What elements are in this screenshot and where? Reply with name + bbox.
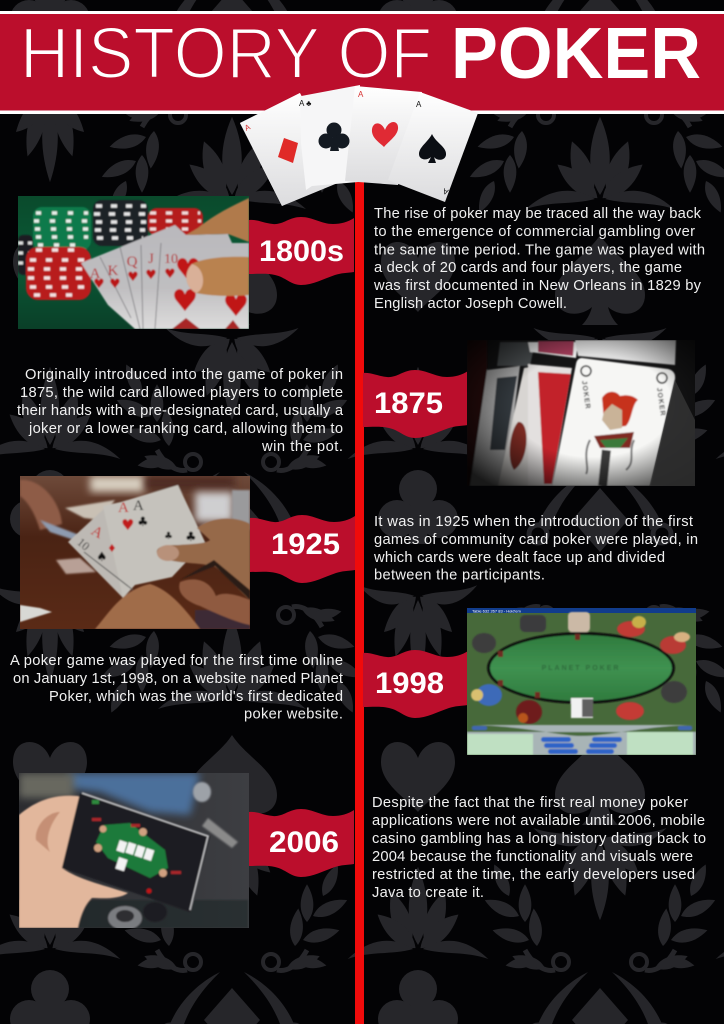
text block: 1998: poker website. [244,706,343,722]
text block: 1875: their hands with a pre-designated card, usually a [17,403,344,419]
text block: 1998: A poker game was played for the first time online [10,653,343,669]
text block: 1875: Originally introduced into the game of poker in [25,367,343,383]
cards: ♥ [121,516,134,534]
cards: ♣ [185,530,197,545]
text block: 1800s: the same time period. The game was played with [374,242,705,258]
icon: fan of four aces: A ♣ [299,99,312,108]
text block: 1998 [10,653,343,722]
year ribbon: 1998: 1998 [375,667,444,700]
photo: Planet Poker online table [467,608,696,755]
hand [186,198,249,242]
playing cards: ♥ [109,277,121,292]
photo: joker card [467,340,695,486]
seats and players [471,612,690,724]
heading: History of Poker: HISTORY OF [20,13,432,94]
year ribbon: 1925: 1925 [271,528,340,561]
year ribbon: 1925 [250,515,355,583]
red chip stack [148,208,203,236]
year ribbon: 1800s: 1800s [259,235,344,268]
text block: 1800s: The rise of poker may be traced all the way back [374,206,702,222]
icon: heart [372,122,398,147]
cards: 10 [74,535,93,553]
icon: fan of four aces: A [441,186,450,197]
playing cards: ♥ [223,289,249,324]
cards: A [88,523,106,542]
text block: 1800s: English actor Joseph Cowell. [374,296,567,312]
photo: Planet Poker online table: PLANET POKER [542,665,620,672]
text block: 1800s: was first documented in New Orleans in 1829 by [373,278,702,294]
text block: 1925: between the participants. [374,568,545,584]
playing cards: ♥ [172,284,198,319]
timeline: vertical red line [355,178,364,1024]
text block: 1998: Poker, which was the world's first dedicated [49,689,343,705]
phone [62,793,210,912]
text block: 2006: restricted at the time, the early developers used [372,867,695,883]
control panel [467,725,696,755]
cards: ♣ [164,531,173,542]
icon: fan of four aces: A [416,100,422,109]
photo: hands holding four aces [20,476,250,629]
icon: fan of four aces: A [358,90,364,99]
jester [586,392,638,486]
year ribbon: 1875 [363,370,468,438]
year ribbon: 1875: 1875 [374,387,443,420]
text block: 2006: Java to create it. [372,885,484,901]
text block: 1925: games of community card poker were played, in [374,532,698,548]
text block: 2006: casino gambling has a long history dating back to [372,831,706,847]
text block: 1800s: a deck of 20 cards and four players, the game [374,260,682,276]
text block: 1925: It was in 1925 when the introduction of the first [374,514,693,530]
playing cards: A [90,266,101,282]
playing cards: 10 [164,252,178,267]
hand [19,796,128,928]
playing cards: Q [127,254,138,270]
icon: fan of four aces: A [243,122,252,133]
cards: ♣ [137,515,149,530]
title banner [0,11,724,114]
heading: History of Poker [20,13,701,94]
year ribbon: 2006 [249,809,354,877]
playing cards: J [148,251,154,267]
black chip stack [93,200,148,246]
cards: A [118,500,129,516]
hand right [157,518,250,600]
playing cards: K [108,263,119,279]
text block: 2006: 2004 because the functionality and visuals were [372,849,693,865]
year ribbon: 2006: 2006 [269,826,339,859]
cards: ♦ [107,542,117,555]
dark chip stack [18,235,33,275]
cards: ♠ [96,550,108,565]
text block: 2006 [372,795,706,901]
playing cards [81,225,249,329]
year ribbon: 1800s [249,217,354,285]
photo: Planet Poker online table: Table 632 267 83 - Hold'em [472,608,521,614]
text block: 1875: 1875, the wild card allowed players to complete [20,385,343,401]
playing cards: ♥ [127,270,139,285]
text block: 2006: Despite the fact that the first real money poker [372,795,688,811]
text block: 2006: applications were not available until 2006, mobile [372,813,705,829]
text block: 1925 [373,514,698,584]
poker table [487,632,675,704]
cards: A [133,498,144,514]
photo: joker card: JOKER [580,380,591,410]
icon: fan of four aces [240,85,478,206]
playing cards: ♥ [175,253,201,288]
text block: 1800s [373,206,705,312]
game table [96,823,168,878]
playing cards: ♥ [93,277,105,292]
playing cards: ♥ [164,267,176,282]
text block: 1875: joker or a lower ranking card, allowing them to [28,421,343,437]
year ribbon: 1998 [363,650,468,718]
playing cards: ♥ [145,268,157,283]
community cards [116,840,154,861]
heading: History of Poker: POKER [451,13,701,94]
icon: club [318,122,350,151]
photo: mobile poker on phone [18,773,249,930]
joker card [552,358,675,486]
text block: 1925: which cards were dealt face up and divided [373,550,665,566]
text block: 1875: win the pot. [261,439,343,455]
green chip stack [33,207,91,250]
text block: 1875 [17,367,344,455]
hand bottom [95,584,200,629]
large red chip stack [26,247,91,300]
text block: 1800s: to the emergence of commercial gambling over [374,224,695,240]
cards [68,485,205,598]
icon: diamond [278,138,298,163]
icon: spade [419,134,446,163]
photo: chips and royal flush [18,196,249,329]
text block: 1998: on January 1st, 1998, on a website named Planet [13,671,343,687]
photo: joker card: JOKER [655,387,666,417]
